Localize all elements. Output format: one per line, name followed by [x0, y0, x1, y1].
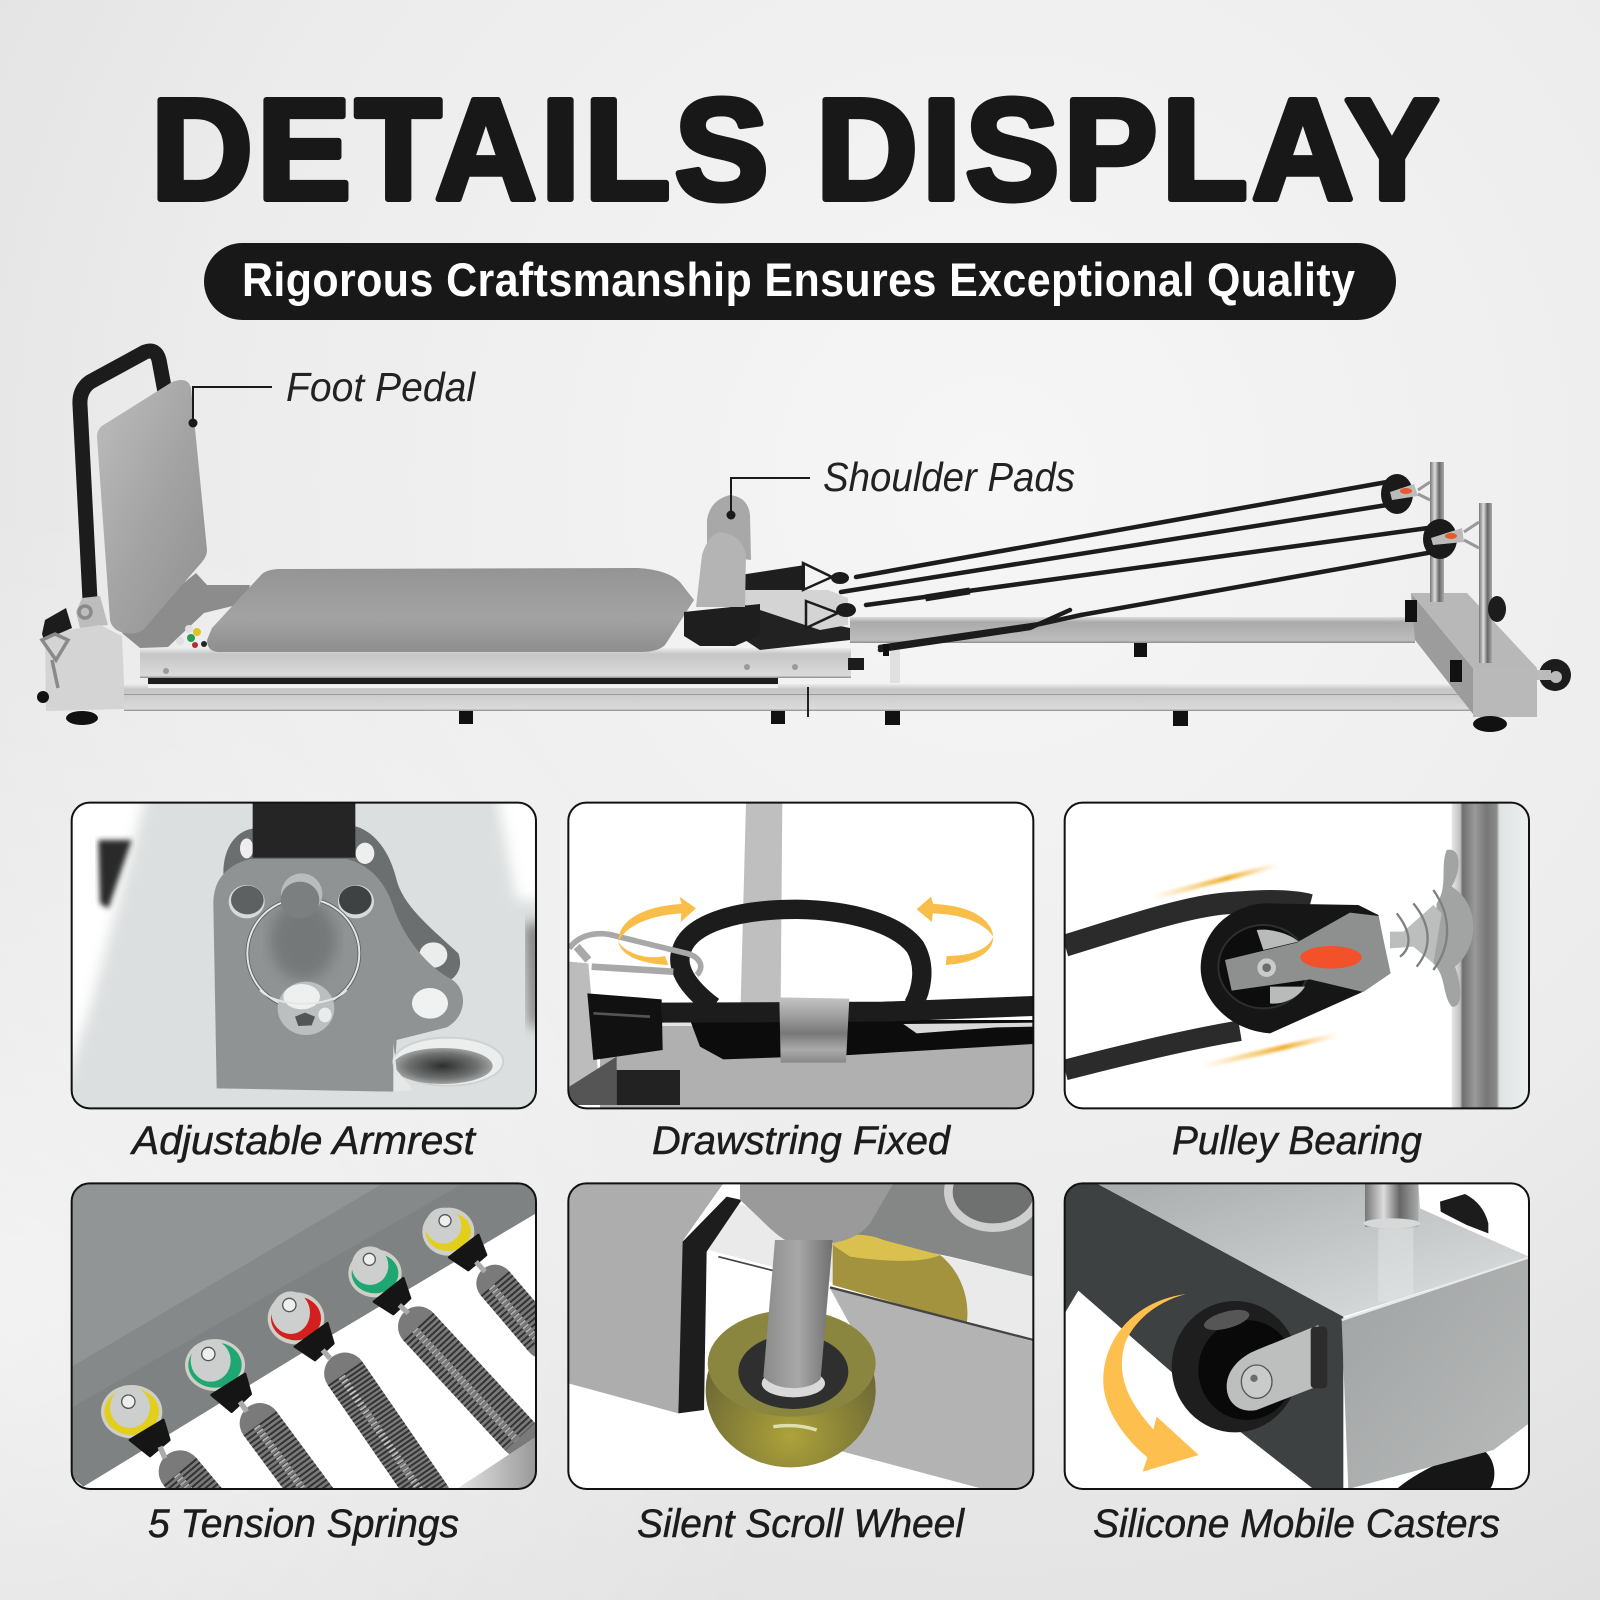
yellow arrow right: [917, 897, 993, 965]
ring: [247, 898, 359, 1008]
bottom surface: [600, 1023, 1033, 1108]
post reflection: [1378, 1228, 1413, 1302]
carriage inner block: [122, 573, 250, 648]
shaft: [763, 1240, 833, 1388]
rope loop: [680, 909, 922, 1007]
caption: Silent Scroll Wheel: Silent Scroll Wheel: [637, 1502, 965, 1546]
ring over bolt: [260, 990, 347, 1004]
steel post: [1452, 803, 1529, 1108]
caption: Pulley Bearing: Pulley Bearing: [1172, 1119, 1422, 1163]
silver ledge: [662, 1022, 692, 1026]
carriage bolts: [163, 664, 798, 674]
top white corner: [1418, 1183, 1529, 1257]
pulley front: [1423, 519, 1479, 559]
subtitle pill: [204, 243, 1396, 320]
shadow inside ring: [270, 900, 337, 980]
ropes: [841, 482, 1433, 650]
pulley arm: [1225, 913, 1391, 992]
right end frame: [1411, 593, 1537, 717]
black tube: [253, 803, 355, 858]
round hole: [393, 1038, 503, 1086]
black bushing: [587, 993, 663, 1060]
pulley rear: [1381, 474, 1430, 514]
back plate: [223, 827, 460, 980]
front plate: [213, 859, 463, 1092]
arm bolt: [1257, 958, 1276, 977]
panel: pulley bearing: [1065, 803, 1529, 1108]
spring dots: [176, 625, 207, 648]
right tube top: [708, 1203, 1033, 1340]
metal clamp: [779, 997, 849, 1063]
post: [1365, 1183, 1418, 1227]
swivel spring: [1397, 890, 1447, 970]
caption: 5 Tension Springs: 5 Tension Springs: [148, 1502, 459, 1546]
swivel mount plate: [1433, 850, 1473, 1007]
black fittings at left: [42, 608, 72, 640]
pad surface: [72, 1183, 463, 1407]
black rope shadow: [690, 1020, 1033, 1059]
bottom black foot: [1397, 1450, 1494, 1489]
handle bar: [80, 351, 165, 600]
carriage frame: [140, 648, 851, 678]
caption: Drawstring Fixed: Drawstring Fixed: [652, 1119, 952, 1163]
front face: [1342, 1258, 1529, 1489]
knots: [831, 572, 970, 617]
label: Foot Pedal: Foot Pedal: [286, 364, 477, 410]
yellow arrow left: [618, 897, 696, 965]
lower long rail: [124, 684, 1474, 711]
caster wheel: [1172, 1301, 1298, 1432]
ropes: [1065, 901, 1310, 946]
left end block: [45, 625, 125, 711]
carabiner: [569, 934, 701, 975]
post rear: [1430, 462, 1444, 602]
motion streaks: [1152, 863, 1338, 1068]
casters: [1488, 596, 1571, 691]
label: Foot Pedal: [188, 364, 477, 428]
black straps: [684, 563, 850, 650]
caption: Silicone Mobile Casters: Silicone Mobile Casters: [1093, 1502, 1500, 1546]
left grey block: [569, 962, 599, 1087]
right tube face: [830, 1288, 1033, 1489]
pulley body: [1201, 903, 1390, 1033]
left clip hardware: [42, 606, 91, 688]
panel: tension springs: [72, 1183, 543, 1507]
caster bolt: [1241, 1365, 1272, 1398]
upper right rail: [850, 617, 1415, 643]
ring detail: [948, 1156, 1038, 1228]
title: DETAILS DISPLAY: [151, 70, 1439, 230]
swivel bell: [1390, 905, 1442, 963]
feet: [37, 600, 1507, 732]
caster arm: [1227, 1325, 1325, 1411]
caption: Adjustable Armrest: Adjustable Armrest: [130, 1119, 477, 1163]
wheel: [706, 1313, 876, 1467]
shoulder pads: [696, 495, 751, 607]
label: Shoulder Pads: [726, 454, 1075, 520]
handle bracket: [76, 596, 108, 628]
label: Shoulder Pads: Shoulder Pads: [823, 454, 1075, 500]
left tube: [568, 1183, 723, 1413]
panel: adjustable armrest: [63, 793, 543, 1108]
foot pedal pad: [97, 380, 207, 634]
seat pad: [207, 568, 694, 652]
black box: [617, 1070, 680, 1105]
plate holes: [229, 885, 265, 918]
bottom right wedge: [457, 1437, 536, 1489]
spring highlights: [177, 1287, 540, 1507]
bolt: [278, 982, 334, 1035]
spring mounts: [101, 1208, 486, 1458]
upper right grey: [837, 1183, 1033, 1277]
dark side: [1065, 1183, 1343, 1489]
shaft cap: [740, 1183, 893, 1245]
rope horizontal: [662, 1006, 1033, 1013]
rear yellow wheel: [833, 1235, 967, 1323]
frame bar: [72, 1183, 536, 1487]
orange badge: [1300, 946, 1362, 969]
black gasket: [678, 1197, 742, 1413]
pin: [281, 873, 322, 906]
panel: drawstring fixed: [568, 803, 1033, 1108]
black knob: [1440, 1194, 1488, 1233]
subtitle pill: Rigorous Craftsmanship Ensures Exceptional Quality: [242, 253, 1355, 306]
reformer machine: [37, 351, 1571, 732]
yellow arrow: [1103, 1294, 1199, 1472]
post front: [1479, 503, 1492, 663]
panel: silicone mobile casters: [1065, 1183, 1529, 1489]
springs: [180, 1283, 543, 1503]
panel: silent scroll wheel: [568, 1156, 1038, 1489]
top face: [1097, 1183, 1529, 1317]
